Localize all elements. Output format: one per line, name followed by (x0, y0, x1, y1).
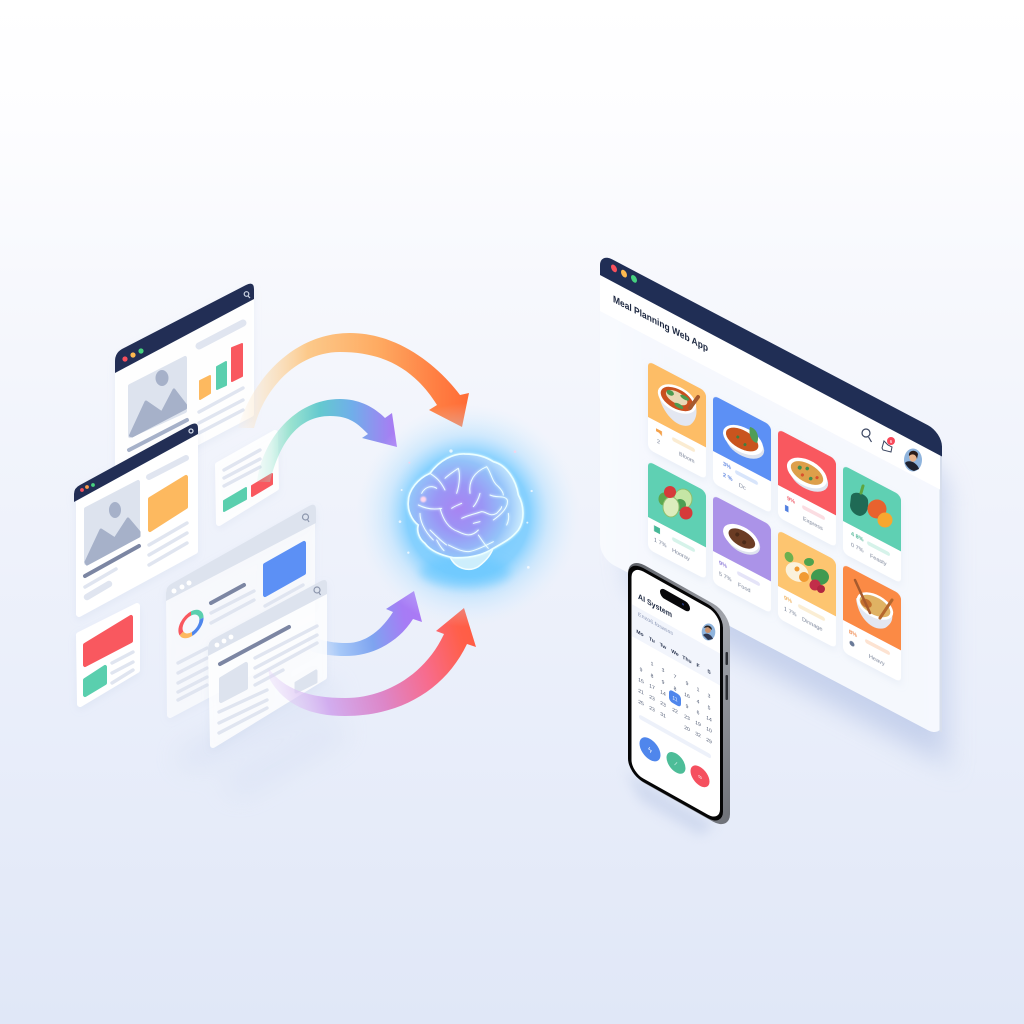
card body (79, 606, 137, 704)
card: soup, row 1 col 1: 2 (657, 439, 660, 446)
calendar dates: 31 (660, 711, 666, 720)
notch (660, 587, 690, 613)
window shadows (175, 680, 345, 795)
calendar dates: 9 (662, 679, 664, 686)
arrow: purple to red arrow (268, 608, 476, 716)
text lines (112, 652, 133, 683)
calendar dates: 10 (706, 726, 712, 735)
phone side buttons (726, 652, 728, 700)
phone shadow (625, 770, 715, 835)
calendar dates: 3 (662, 667, 664, 674)
panel: small card with red banner (79, 606, 137, 704)
card: vegetables, row 1 col 4: 0 7% (851, 542, 864, 555)
card: egg and greens, row 2 col 3: 9% (784, 595, 793, 606)
calendar dates: 3 (708, 693, 710, 700)
calendar dates: 4 (697, 699, 699, 706)
calendar dates: 5 (708, 705, 710, 712)
title bar (166, 505, 316, 601)
card: rice bowl, row 1 col 3: 9% (787, 496, 796, 506)
calendar weekday headers: Mo (636, 629, 644, 639)
window body (118, 287, 251, 484)
icon: avatar (904, 448, 922, 472)
card: vegetables, row 1 col 4: Feasty (870, 553, 887, 568)
sparkles (399, 449, 533, 569)
calendar dates: 9 (686, 681, 688, 688)
panel: Meal Planning Web App window (600, 253, 942, 738)
card: curry, row 1 col 2: 3% (723, 462, 732, 472)
window body (600, 253, 942, 738)
calendar dates: 1 (697, 687, 699, 694)
calendar dates: 22 (672, 707, 678, 716)
image placeholder (130, 358, 186, 436)
title: Meal Planning Web App (613, 294, 708, 355)
card: soup, row 1 col 1: Bloom (679, 452, 695, 465)
icon: search (189, 429, 193, 433)
title bar (208, 580, 327, 656)
card: salad, row 2 col 1 (648, 461, 706, 579)
card: rice bowl, row 1 col 3: Express (803, 516, 823, 532)
phone: AI System (628, 556, 730, 831)
pale bar (639, 714, 711, 759)
calendar dates: 29 (706, 737, 712, 746)
window body (79, 428, 195, 614)
calendar dates: 14 (660, 689, 666, 698)
title bar (74, 424, 198, 502)
title bar (600, 253, 942, 457)
text lines (178, 585, 303, 700)
icon: glowing brain (399, 449, 533, 587)
under-glow (420, 557, 510, 587)
window right edge (940, 453, 942, 733)
arrow: orange top arrow (238, 333, 469, 428)
window body (169, 508, 312, 715)
icon: notification bell: 6 (890, 439, 893, 444)
card: beef dish, row 2 col 2 (713, 495, 771, 613)
calendar dates: 20 (684, 725, 690, 733)
traffic lights (122, 348, 144, 362)
donut chart (180, 608, 202, 640)
title bar (115, 284, 254, 373)
panel: second browser window with orange block (74, 424, 198, 614)
calendar weekday headers: F (696, 663, 700, 670)
card: egg and greens, row 2 col 3: 1 7% (784, 606, 797, 619)
brain body (408, 454, 523, 558)
card: salad, row 2 col 1: Hooray (672, 548, 690, 563)
calendar weekday headers (636, 629, 711, 676)
traffic lights (611, 263, 637, 284)
heading line (220, 627, 289, 664)
text lines (224, 450, 260, 486)
calendar dates: 6 (697, 710, 699, 717)
calendar dates: 23 (660, 700, 666, 709)
card: noodle bowl, row 2 col 4: 8% (849, 629, 858, 640)
calendar dates: 14 (706, 715, 712, 724)
calendar dates: 11 (672, 695, 678, 704)
calendar dates (638, 654, 712, 746)
brain folds (418, 467, 509, 552)
calendar dates: 9 (686, 704, 688, 711)
traffic lights (80, 483, 95, 492)
header strip (600, 275, 940, 490)
green tile (85, 667, 105, 695)
text lines (149, 458, 187, 565)
calendar dates: 8 (674, 686, 676, 693)
panel: front window with document (208, 580, 327, 745)
calendar weekday headers: S (707, 669, 711, 676)
calendar weekday headers: Tw (660, 642, 667, 652)
calendar dates: 23 (649, 705, 655, 714)
calendar dates: 17 (649, 683, 655, 692)
calendar weekday headers: Tu (649, 636, 655, 645)
small thumbnail (296, 671, 316, 692)
brain glow (356, 403, 580, 627)
card: egg and greens, row 2 col 3 (778, 530, 836, 648)
action buttons: ⁄ (674, 760, 677, 769)
calendar dates: 8 (651, 673, 653, 680)
panel: translucent window with donut chart (166, 505, 316, 715)
phone avatar (702, 624, 715, 640)
calendar dates: 7 (674, 674, 676, 681)
calendar dates: 1 (651, 661, 653, 668)
arrow: teal to purple arrow (257, 399, 397, 482)
card body (218, 433, 276, 523)
window body (211, 584, 324, 745)
card: salad, row 2 col 1: 1 7% (654, 537, 667, 550)
arrow: blue to purple arrow (308, 591, 422, 656)
card: egg and greens, row 2 col 3: Dinnage (802, 617, 822, 633)
thumbnail (221, 664, 246, 701)
calendar dates: 21 (638, 688, 644, 697)
selected date (669, 689, 681, 708)
green button (224, 488, 246, 511)
card: curry, row 1 col 2 (713, 395, 771, 513)
icon: notification bell (882, 437, 895, 452)
card: vegetables, row 1 col 4: 4 8% (851, 531, 864, 544)
card: rice bowl, row 1 col 3 (778, 429, 836, 547)
caption lines (85, 546, 139, 597)
card: vegetables, row 1 col 4 (843, 465, 901, 583)
window dots (215, 635, 233, 647)
phone screen (632, 565, 720, 822)
phone subtitle band (632, 604, 720, 686)
panel: top-left browser window with chart (115, 284, 254, 484)
text lines (199, 388, 243, 433)
calendar dates: 15 (638, 677, 644, 686)
bright spot (420, 496, 426, 502)
calendar dates: 32 (695, 731, 701, 740)
cerebellum (450, 547, 493, 569)
icon: search (314, 587, 320, 595)
card: curry, row 1 col 2: Dc (739, 483, 746, 492)
red button (252, 474, 272, 496)
window dots (172, 580, 192, 594)
blue image block (265, 543, 304, 595)
icon: search (302, 514, 309, 522)
phone frame (628, 556, 730, 831)
calendar dates: 23 (684, 714, 690, 722)
image placeholder (86, 482, 139, 564)
phone title: AI System (638, 591, 672, 619)
calendar dates: 9 (640, 667, 642, 674)
icon: search (244, 292, 250, 298)
panel: small card with green and red buttons (218, 433, 276, 523)
phone bezel (628, 560, 723, 827)
orange image block (150, 477, 186, 530)
action buttons: ϟ (648, 745, 652, 755)
card: noodle bowl, row 2 col 4 (843, 564, 901, 682)
bar chart (200, 344, 242, 399)
card: soup, row 1 col 1 (648, 361, 706, 479)
heading line (199, 323, 243, 346)
red banner (85, 617, 131, 665)
calendar dates: 19 (695, 720, 701, 729)
action buttons (640, 733, 710, 793)
calendar weekday headers: Thu (682, 655, 692, 665)
phone subtitle: Enzo6.fosasss (638, 612, 673, 637)
text lines (219, 626, 317, 733)
caption line (129, 420, 187, 450)
calendar dates: 16 (684, 692, 690, 700)
card: beef dish, row 2 col 2: Food (738, 582, 751, 595)
main window shadow (630, 303, 946, 765)
card: beef dish, row 2 col 2: 9% (719, 560, 728, 571)
calendar dates: 25 (638, 699, 644, 708)
action buttons: ≈ (698, 772, 702, 782)
icon: search (862, 429, 872, 442)
card: curry, row 1 col 2: 2 % (723, 473, 733, 483)
card: noodle bowl, row 2 col 4: Heavy (869, 654, 885, 668)
calendar dates: 23 (649, 694, 655, 703)
card: beef dish, row 2 col 2: 5 7% (719, 571, 732, 584)
calendar weekday headers: We (671, 649, 679, 658)
